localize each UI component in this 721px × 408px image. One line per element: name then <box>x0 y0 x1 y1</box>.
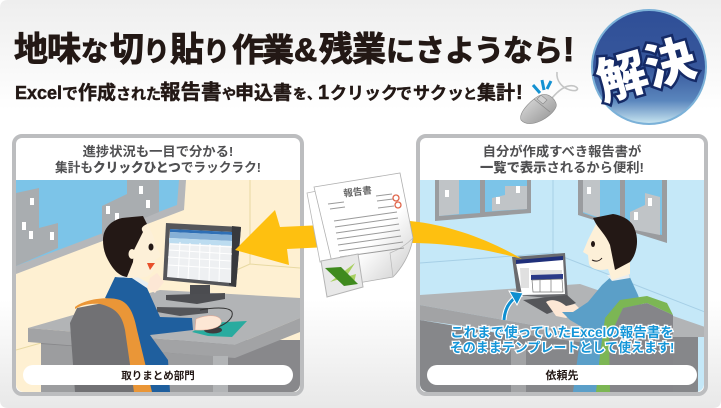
title: 残 <box>319 31 353 69</box>
title: 地 <box>14 31 48 69</box>
label pill <box>23 365 293 385</box>
subtitle: を、 <box>293 86 321 102</box>
subtitle: ! <box>516 82 523 104</box>
title: に <box>386 36 415 68</box>
subtitle: された <box>116 86 161 103</box>
label pill: 依頼先 <box>546 368 578 382</box>
icon: blue pointer arrow <box>504 291 523 320</box>
subtitle: 集計 <box>477 81 515 104</box>
subtitle: サクッ <box>413 84 464 103</box>
subtitle: と <box>463 86 477 102</box>
subtitle: 報告書 <box>160 81 222 104</box>
subtitle: Excel <box>15 83 62 103</box>
title: り <box>203 37 230 67</box>
subtitle: や <box>222 86 236 102</box>
title: 業 <box>262 32 294 68</box>
label pill: 取りまとめ部門 <box>121 369 195 382</box>
title: な <box>81 37 108 67</box>
callout text <box>450 324 674 355</box>
icon: report documents with Excel logo: 報告書 <box>343 184 373 200</box>
badge: 解決: 解決 <box>587 18 703 115</box>
callout text: これまで使っていたExcelの報告書を <box>450 324 674 340</box>
header text <box>480 143 644 175</box>
subtitle: で <box>396 86 412 103</box>
subtitle: で <box>62 86 78 103</box>
callout text: そのままテンプレートとして使えます! <box>450 340 674 355</box>
subtitle: 1 <box>318 82 329 104</box>
title: 作 <box>232 32 264 68</box>
header text: 集計もクリックひとつでラックラク! <box>55 159 261 175</box>
icon: computer mouse <box>521 72 577 124</box>
office scene <box>420 180 705 392</box>
subtitle: クリック <box>330 84 398 103</box>
arrow: yellow flow from laptop to monitor <box>235 210 522 265</box>
title: & <box>294 32 317 68</box>
title: 業 <box>352 31 386 69</box>
icon: report documents with Excel logo <box>307 173 413 297</box>
title: さ <box>415 35 445 68</box>
title: り <box>143 37 170 67</box>
header text: 一覧で表示されるから便利! <box>480 159 644 175</box>
title: よ <box>445 35 475 68</box>
title: 切 <box>110 31 144 69</box>
title: ! <box>563 31 574 69</box>
title: な <box>503 35 533 68</box>
panel: right, 依頼先 <box>418 136 706 394</box>
title: 味 <box>47 31 81 69</box>
header text <box>55 143 261 175</box>
office scene <box>16 180 300 392</box>
title: ら <box>533 35 563 68</box>
header text: 進捗状況も一目で分かる! <box>83 143 233 159</box>
subtitle: 申込書 <box>235 81 292 104</box>
panel: left, 取りまとめ部門 <box>14 136 302 394</box>
title: う <box>474 35 504 68</box>
subtitle: 作成 <box>78 81 116 104</box>
title: 貼 <box>170 31 204 69</box>
header text: 自分が作成すべき報告書が <box>483 143 642 159</box>
label pill <box>427 365 697 385</box>
